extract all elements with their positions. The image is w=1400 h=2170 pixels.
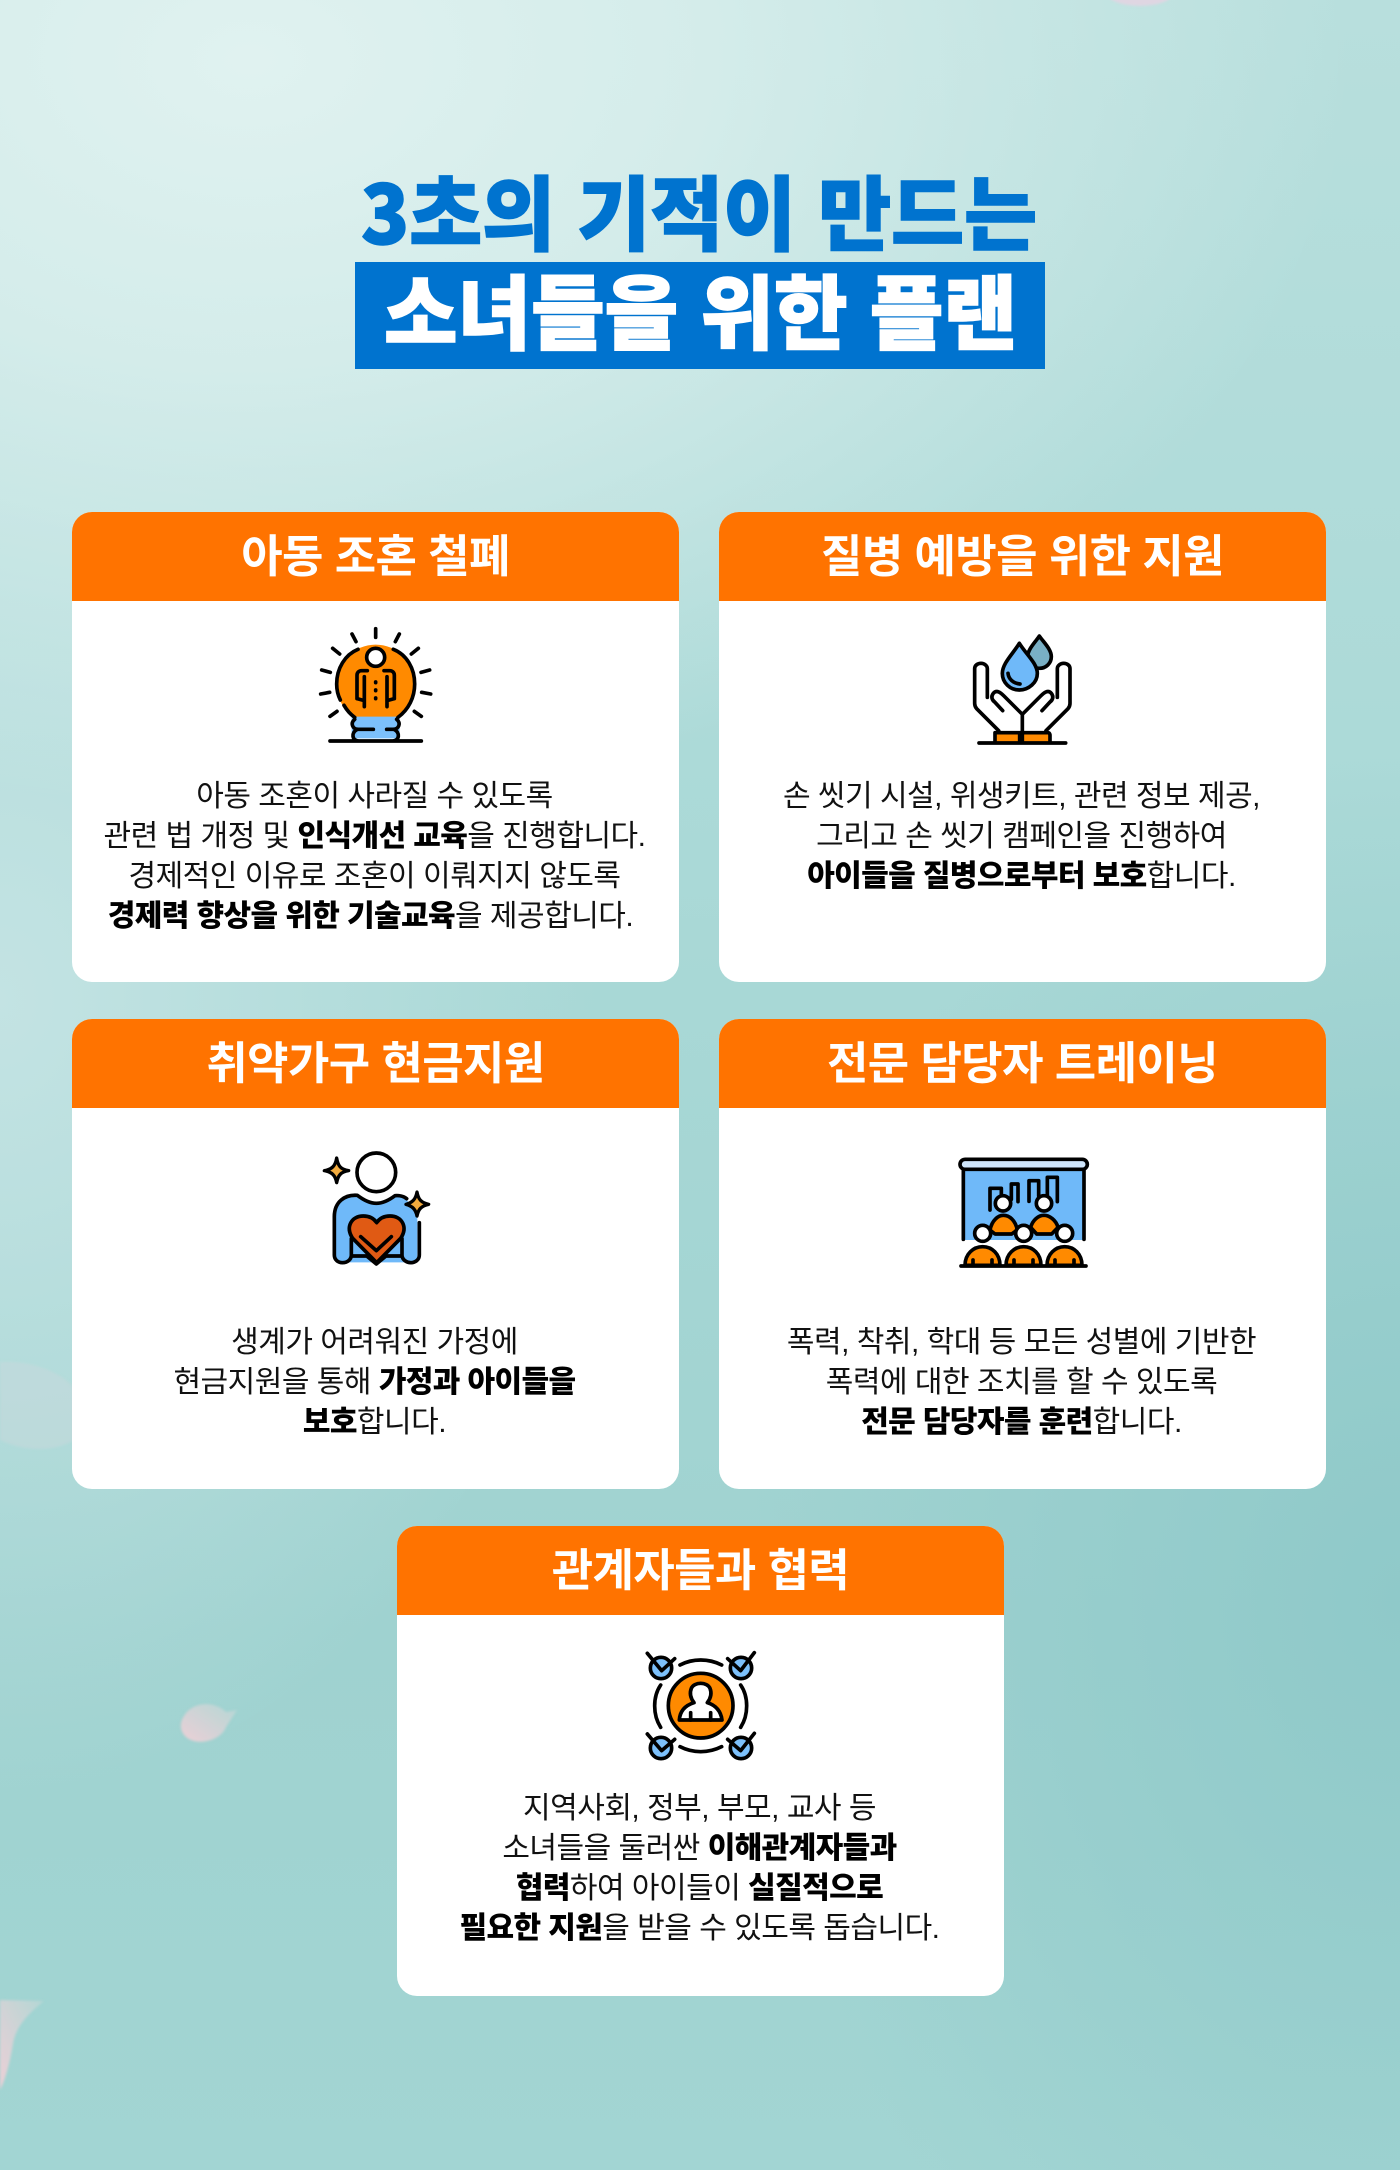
heading: 질병 예방을 위한 지원 — [821, 531, 1224, 582]
icon: stakeholders network — [645, 1650, 756, 1760]
text block: 아이들을 질병으로부터 보호합니다. — [807, 860, 1236, 893]
panel: 관계자들과 협력 — [397, 1526, 1004, 1996]
title line 1: 3초의 기적이 만드는 — [361, 151, 1037, 268]
icon: training audience — [958, 1158, 1090, 1268]
text block: 소녀들을 둘러싼 이해관계자들과 — [502, 1832, 897, 1865]
panel: 아동 조혼 철폐 — [72, 512, 679, 982]
text block: 아동 조혼이 사라질 수 있도록 — [196, 780, 553, 813]
heading — [397, 1526, 1004, 1615]
text block: 전문 담당자를 훈련합니다. — [861, 1406, 1182, 1439]
text block: 생계가 어려워진 가정에 — [231, 1326, 518, 1359]
panel: 전문 담당자 트레이닝 — [719, 1019, 1326, 1489]
heading: 전문 담당자 트레이닝 — [827, 1038, 1218, 1089]
panel: 질병 예방을 위한 지원 — [719, 512, 1326, 982]
text block — [104, 780, 645, 933]
heading — [719, 512, 1326, 601]
text block: 폭력에 대한 조치를 할 수 있도록 — [826, 1366, 1217, 1399]
heading: 관계자들과 협력 — [552, 1545, 849, 1596]
text block: 협력하여 아이들이 실질적으로 — [516, 1872, 883, 1905]
text block — [459, 1792, 940, 1945]
heading — [72, 512, 679, 601]
text block: 지역사회, 정부, 부모, 교사 등 — [523, 1792, 876, 1825]
text block — [787, 1326, 1256, 1439]
heading — [72, 1019, 679, 1108]
title — [355, 151, 1045, 369]
text block — [173, 1326, 576, 1439]
text block: 경제력 향상을 위한 기술교육을 제공합니다. — [108, 900, 633, 933]
text block: 현금지원을 통해 가정과 아이들을 — [173, 1366, 576, 1399]
text block: 관련 법 개정 및 인식개선 교육을 진행합니다. — [104, 820, 645, 853]
heading — [719, 1019, 1326, 1108]
text block: 경제적인 이유로 조혼이 이뤄지지 않도록 — [128, 860, 621, 893]
text block: 보호합니다. — [303, 1406, 446, 1439]
text block: 폭력, 착취, 학대 등 모든 성별에 기반한 — [787, 1326, 1256, 1359]
heading: 아동 조혼 철폐 — [241, 531, 510, 582]
heading: 취약가구 현금지원 — [206, 1038, 545, 1089]
text block: 그리고 손 씻기 캠페인을 진행하여 — [816, 820, 1227, 853]
icon: person with heart — [322, 1151, 430, 1266]
icon: hands and water drops — [972, 634, 1072, 745]
panel: 취약가구 현금지원 — [72, 1019, 679, 1489]
text block: 필요한 지원을 받을 수 있도록 돕습니다. — [459, 1912, 940, 1945]
icon: light bulb with person — [318, 626, 432, 743]
text block — [783, 780, 1260, 893]
title banner: 소녀들을 위한 플랜 — [384, 250, 1017, 367]
text block: 손 씻기 시설, 위생키트, 관련 정보 제공, — [783, 780, 1260, 813]
